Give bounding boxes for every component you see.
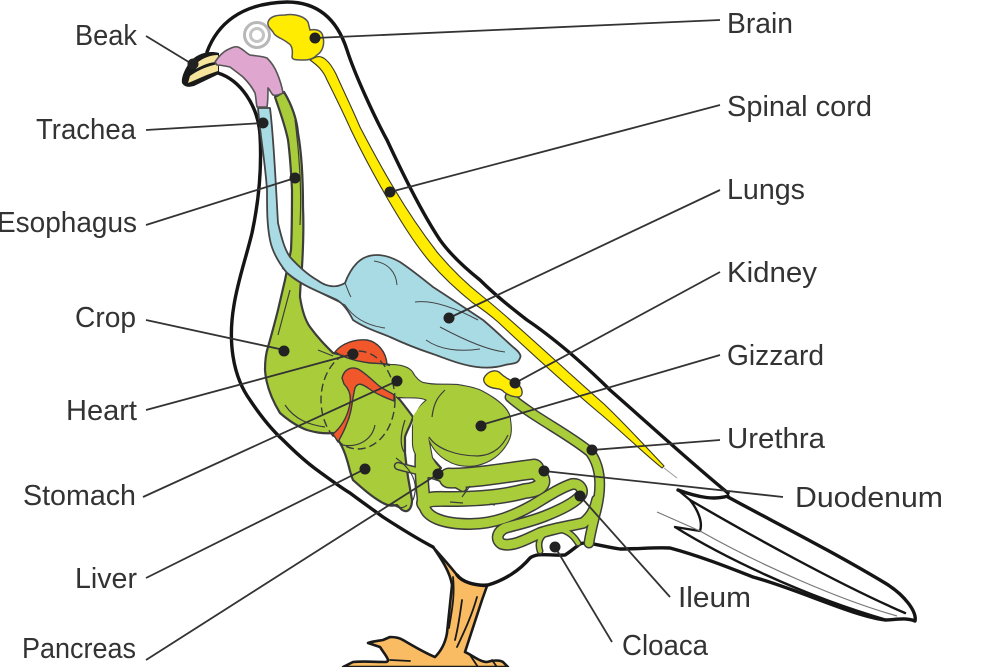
label: Lungs bbox=[444, 174, 805, 324]
spinal cord bbox=[310, 57, 664, 468]
spinal cord tail end bbox=[664, 468, 677, 478]
label: Crop bbox=[75, 302, 290, 356]
label: Esophagus: Esophagus bbox=[0, 207, 137, 239]
label: Brain: Brain bbox=[727, 8, 793, 40]
label: Brain bbox=[310, 8, 793, 44]
label: Heart: Heart bbox=[66, 395, 137, 427]
label: Spinal cord: Spinal cord bbox=[727, 91, 872, 123]
label: Lungs: Lungs bbox=[727, 174, 805, 206]
tract outlines bbox=[398, 397, 600, 551]
icon: eye bbox=[244, 22, 270, 48]
label: Liver bbox=[75, 464, 370, 595]
tract fills bbox=[398, 397, 600, 551]
label: Liver: Liver bbox=[75, 563, 138, 595]
brain bbox=[268, 14, 324, 60]
label: Crop: Crop bbox=[75, 302, 136, 334]
label: Beak bbox=[75, 20, 198, 70]
icon: beak bbox=[182, 52, 219, 87]
label: Gizzard: Gizzard bbox=[727, 340, 824, 372]
label: Esophagus bbox=[0, 172, 300, 239]
label: Gizzard bbox=[476, 340, 824, 432]
label: Trachea bbox=[36, 114, 268, 146]
label: Urethra: Urethra bbox=[727, 423, 825, 455]
organ detail lines bbox=[278, 120, 508, 508]
trachea and lungs bbox=[258, 108, 521, 368]
label: Duodenum: Duodenum bbox=[795, 482, 943, 514]
body outline bbox=[207, 2, 915, 621]
label: Heart bbox=[66, 348, 358, 427]
label: Trachea: Trachea bbox=[36, 114, 136, 146]
label: Stomach bbox=[23, 376, 402, 512]
label: Stomach: Stomach bbox=[23, 480, 136, 512]
kidney bbox=[484, 371, 522, 397]
gizzard and stomach fill over tract outlines bbox=[390, 365, 511, 478]
label: Beak: Beak bbox=[75, 20, 138, 52]
digestive tract bbox=[398, 397, 600, 551]
label: Ileum: Ileum bbox=[678, 582, 751, 614]
lung crease lines bbox=[282, 261, 505, 352]
trachea larynx (pink) bbox=[215, 47, 283, 107]
label: Urethra bbox=[586, 423, 825, 456]
label: Cloaca bbox=[550, 542, 708, 662]
label: Kidney bbox=[510, 257, 818, 388]
tail feather fine line bbox=[657, 512, 897, 616]
label: Spinal cord bbox=[384, 91, 872, 198]
label: Ileum bbox=[574, 490, 751, 614]
dashed heart pericardium bbox=[321, 351, 395, 449]
label: Kidney: Kidney bbox=[727, 257, 818, 289]
label: Duodenum bbox=[538, 466, 943, 514]
esophagus, crop, stomach, liver and gizzard (outline layer) bbox=[265, 92, 511, 511]
label: Pancreas bbox=[22, 468, 444, 665]
heart bbox=[333, 340, 394, 442]
label: Cloaca: Cloaca bbox=[622, 630, 708, 662]
label: Pancreas: Pancreas bbox=[22, 633, 136, 665]
icon: leg and foot bbox=[343, 547, 508, 667]
